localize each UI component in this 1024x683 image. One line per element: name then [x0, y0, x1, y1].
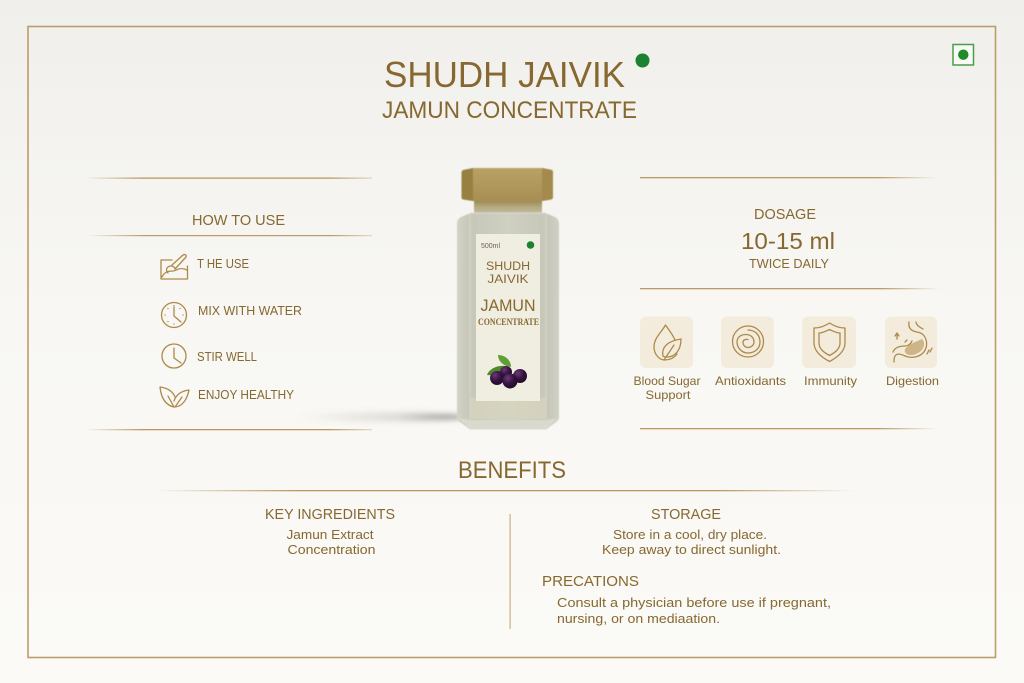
step: stir well: STIR WELL: [197, 350, 257, 364]
product bottle: JAIVIK: [488, 274, 529, 286]
panel: dosage: [640, 177, 940, 289]
step: the use: [161, 255, 249, 279]
text block: storage: Store in a cool, dry place.: [613, 527, 767, 542]
step: enjoy healthy: ENJOY HEALTHY: [198, 388, 295, 402]
step: the use: T HE USE: [197, 257, 249, 271]
product bottle: SHUDH: [486, 261, 530, 273]
step: stir well: [162, 344, 257, 368]
panel: benefit icons: [634, 316, 939, 402]
text block: precautions: PRECATIONS: [542, 573, 639, 590]
step: mix with water: MIX WITH WATER: [198, 304, 302, 318]
bottle body: [457, 212, 559, 430]
text block: storage: STORAGE: [651, 506, 721, 523]
bottle neck: [474, 198, 542, 218]
title: brand and product name: JAMUN CONCENTRATE: [382, 97, 637, 124]
product bottle: [457, 168, 559, 430]
icon: jamun berries: [487, 355, 527, 388]
step: enjoy healthy: [160, 387, 295, 407]
step: mix with water: [162, 302, 302, 328]
bottle cap: [462, 168, 553, 201]
text block: key ingredients: [265, 506, 395, 557]
text: frequency: TWICE DAILY: [749, 256, 829, 271]
label green dot: [527, 241, 534, 249]
text: dosage amount: 10-15 ml: [741, 228, 835, 254]
text block: storage: [602, 506, 781, 557]
text block: precautions: nursing, or on mediaation.: [557, 611, 720, 626]
text block: key ingredients: Jamun Extract: [286, 527, 374, 542]
text: dosage label: DOSAGE: [754, 207, 816, 223]
title: brand and product name: [382, 54, 637, 124]
benefit: digestion: Digestion: [886, 374, 939, 388]
panel: how to use: [85, 178, 372, 430]
benefit: blood sugar support: [634, 316, 701, 402]
benefit: antioxidants: Antioxidants: [715, 374, 786, 388]
text block: key ingredients: KEY INGREDIENTS: [265, 506, 395, 523]
text block: key ingredients: Concentration: [288, 542, 376, 557]
product bottle: 500ml: [481, 243, 501, 250]
benefit: blood sugar support: Support: [646, 388, 691, 402]
product bottle: JAMUN: [480, 296, 536, 315]
icon: vegetarian mark: [953, 44, 974, 65]
benefit: immunity: Immunity: [804, 374, 857, 388]
product bottle: CONCENTRATE: [478, 317, 539, 327]
text block: storage: Keep away to direct sunlight.: [602, 542, 781, 557]
heading: how to use: HOW TO USE: [192, 212, 285, 229]
benefit: immunity: [802, 316, 857, 388]
benefit: digestion: [885, 316, 939, 388]
text block: precautions: Consult a physician before use if pregnant,: [557, 595, 831, 610]
icon: green dot beside title: [636, 54, 650, 68]
text block: precautions: [542, 573, 831, 626]
bottle label: [476, 234, 540, 401]
bottle shadow: [295, 412, 465, 422]
benefit: antioxidants: [715, 316, 786, 388]
heading: benefits: BENEFITS: [458, 457, 566, 484]
benefit: blood sugar support: Blood Sugar: [634, 374, 701, 388]
title: brand and product name: SHUDH JAIVIK: [384, 54, 625, 95]
